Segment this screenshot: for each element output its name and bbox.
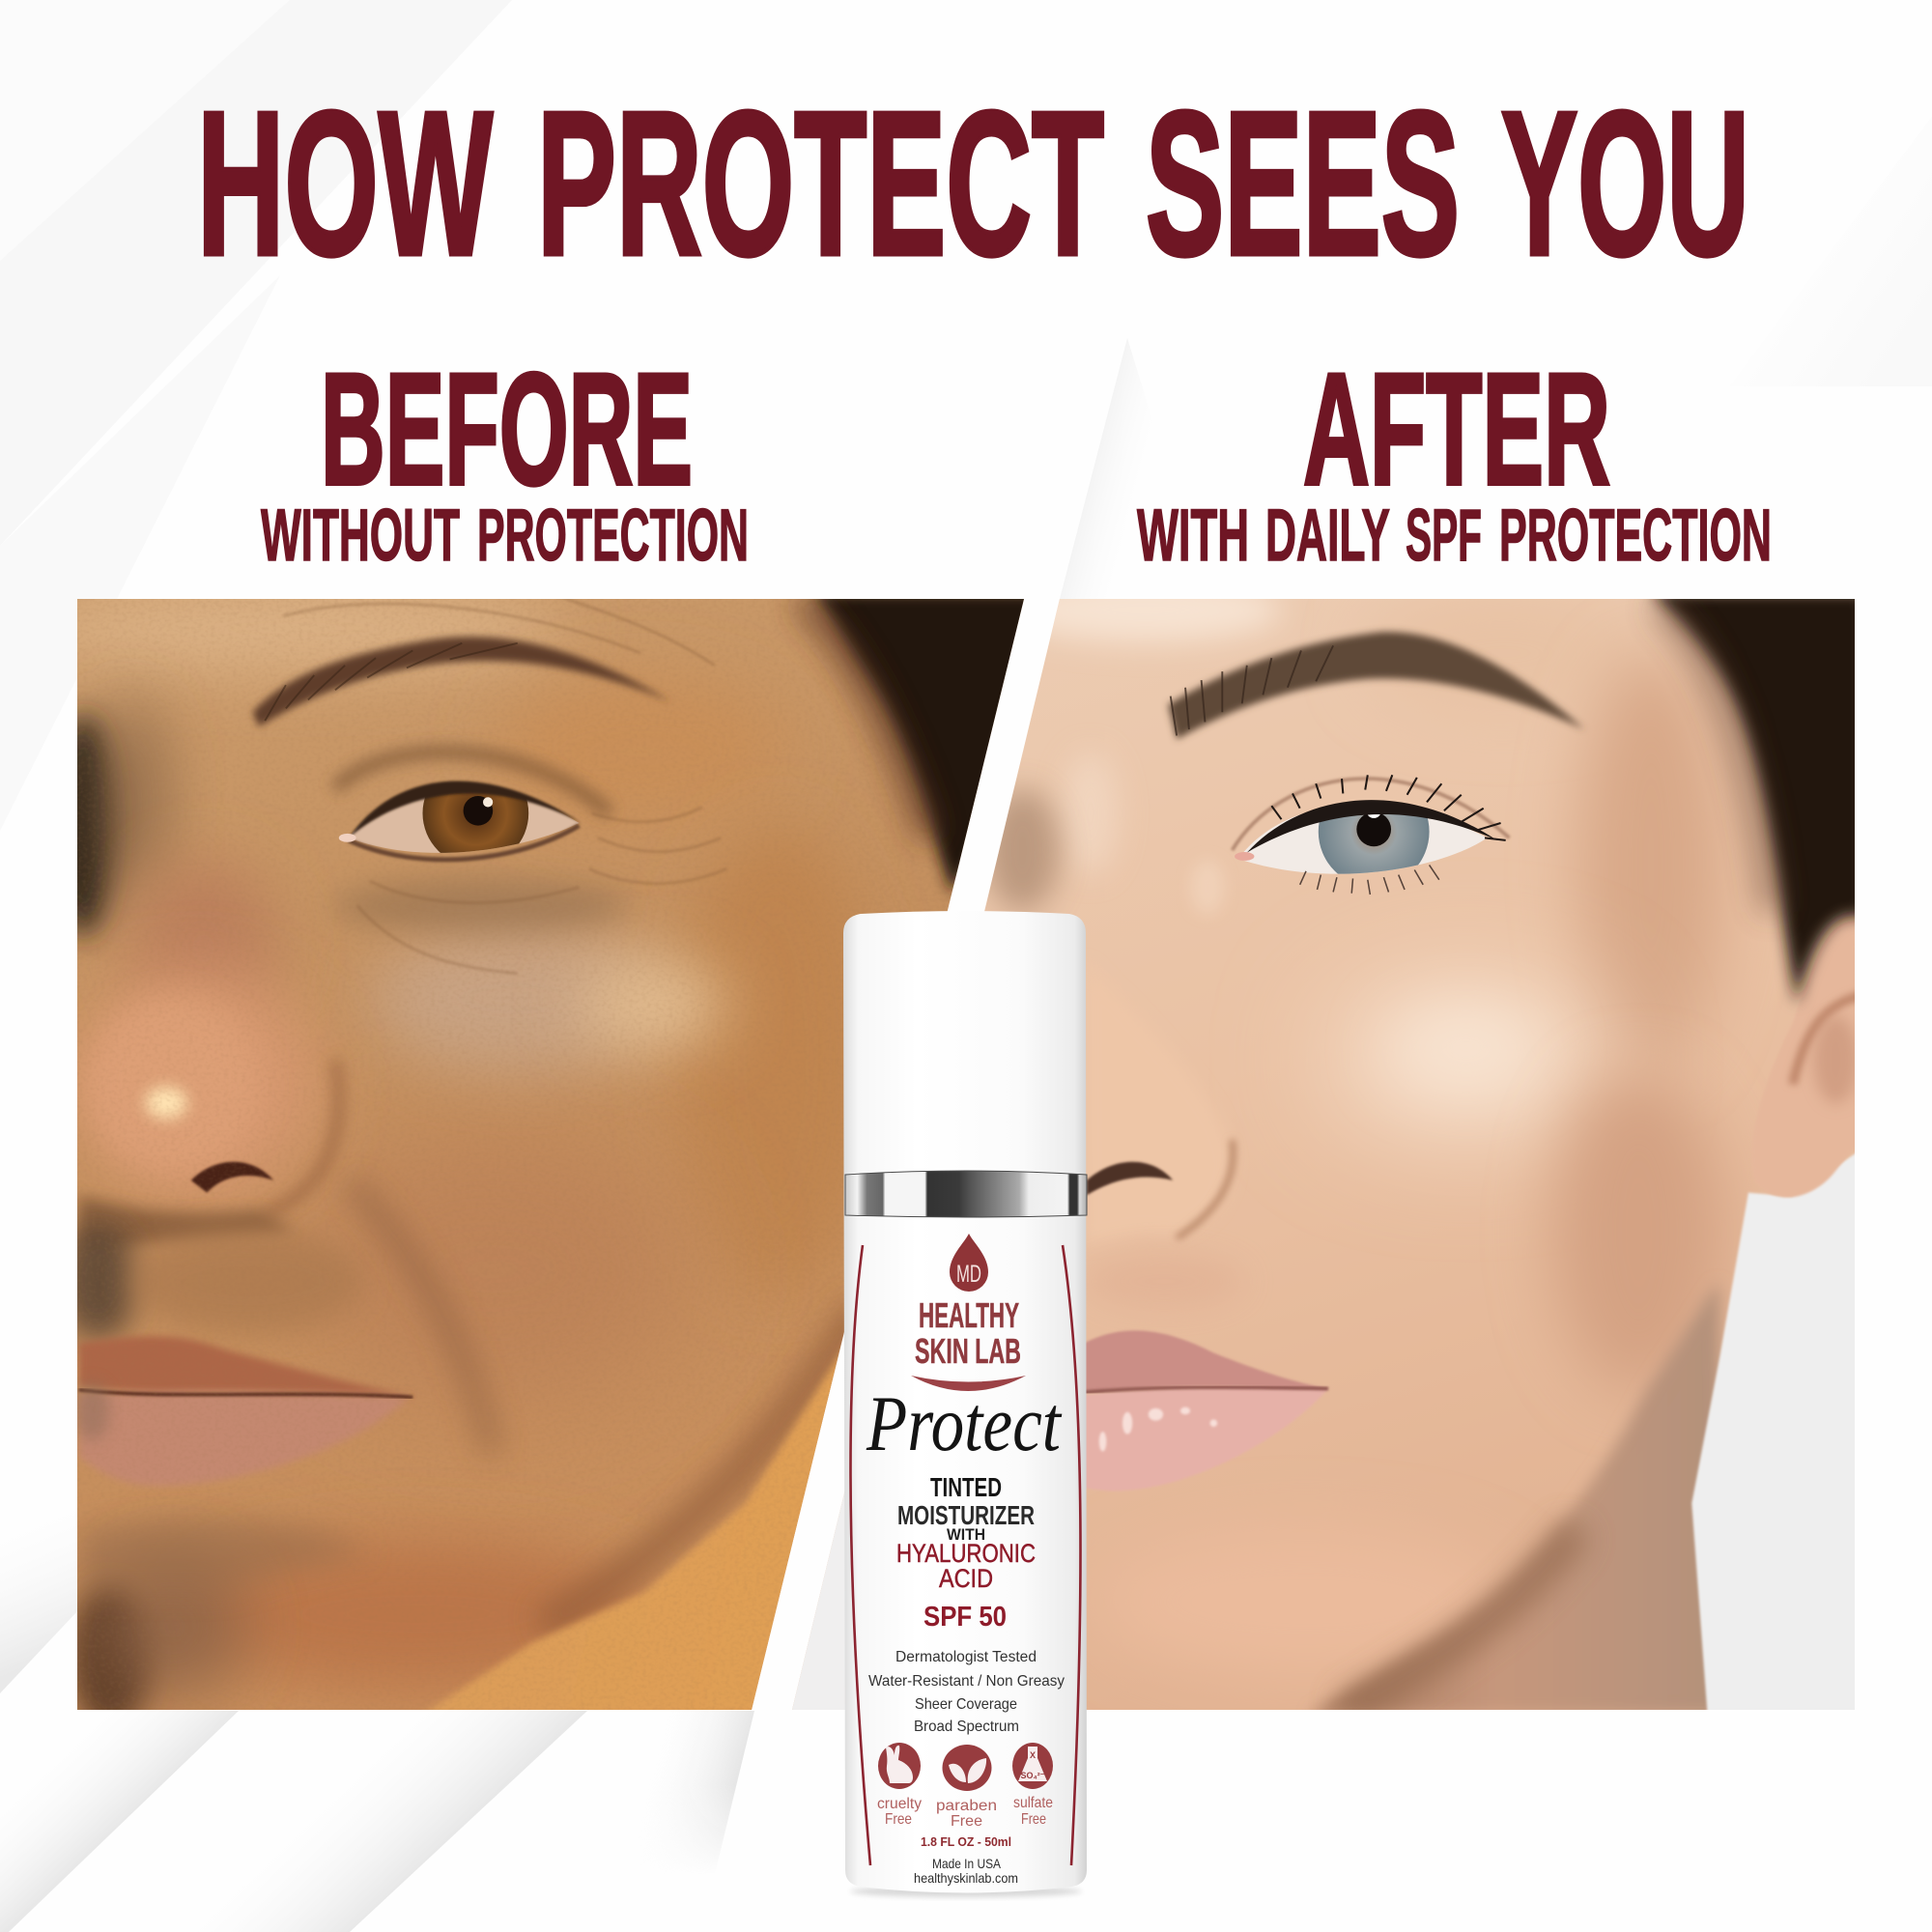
chin shadow [69, 1583, 153, 1731]
lips [79, 1336, 412, 1396]
subheading: without protection: WITHOUT [261, 495, 460, 577]
origin and website: Made In USA [932, 1856, 1002, 1871]
shadow beside nose bridge [52, 715, 116, 936]
product description: SPF 50 [923, 1602, 1007, 1633]
claims list: Dermatologist Tested [895, 1649, 1037, 1665]
neck [429, 1349, 840, 1710]
subheading: with daily spf protection: SPF [1406, 495, 1482, 577]
skin texture [77, 612, 809, 1710]
product description: ACID [939, 1564, 993, 1593]
subheading: with daily spf protection: WITH [1137, 495, 1249, 577]
label side curves [850, 1245, 1081, 1865]
claims list [868, 1649, 1065, 1735]
crow's feet and wrinkles [283, 579, 727, 974]
title: SEES [1146, 69, 1460, 298]
logo drop [950, 1234, 988, 1292]
icon: sulfate free flask: SO₄²⁻ [1020, 1771, 1045, 1780]
title: PROTECT [537, 69, 1104, 298]
subheading: with daily spf protection: DAILY [1265, 495, 1390, 577]
icon labels: paraben [936, 1798, 997, 1814]
product description: MOISTURIZER [897, 1500, 1035, 1530]
studio backdrop [1691, 1146, 1866, 1719]
icon labels: Free [885, 1811, 912, 1828]
eye [335, 753, 610, 813]
title: HOW [197, 69, 493, 298]
forehead light [1010, 578, 1282, 642]
brand name [915, 1295, 1021, 1371]
hair [1651, 591, 1866, 1005]
product description: WITH [947, 1525, 985, 1544]
icon: cruelty free rabbit [878, 1743, 921, 1789]
title: YOU [1501, 69, 1749, 298]
icon labels [877, 1795, 1053, 1830]
eyebrow [1168, 632, 1584, 739]
eye [1233, 779, 1509, 850]
lips [1084, 1330, 1328, 1392]
swoosh [911, 1376, 1026, 1391]
brand name: SKIN LAB [915, 1331, 1021, 1371]
claims list: Broad Spectrum [914, 1719, 1019, 1735]
product description: HYALURONIC [896, 1539, 1036, 1568]
volume: 1.8 FL OZ - 50ml [921, 1834, 1011, 1849]
panel: after face photo [788, 578, 1873, 1719]
title [197, 69, 1749, 298]
claims list: Sheer Coverage [915, 1696, 1017, 1713]
product name: Protect [866, 1379, 1063, 1467]
origin and website [914, 1856, 1018, 1886]
brand name: HEALTHY [919, 1295, 1019, 1335]
neck [1309, 1282, 1725, 1715]
logo drop: MD [956, 1261, 981, 1288]
product bottle [843, 911, 1087, 1897]
claims list: Water-Resistant / Non Greasy [868, 1673, 1065, 1690]
bottle body [843, 911, 1087, 1893]
heading: before: BEFORE [321, 340, 693, 518]
icon: sulfate free flask: X [1030, 1750, 1036, 1760]
nose [1084, 961, 1233, 1244]
product description [896, 1472, 1036, 1633]
icon labels: cruelty [877, 1796, 922, 1812]
product description: TINTED [930, 1472, 1002, 1502]
nose [74, 971, 321, 1198]
bottle shadow [850, 1886, 1082, 1897]
origin and website: healthyskinlab.com [914, 1870, 1018, 1886]
panel: before face photo [25, 579, 1047, 1731]
background: white with soft diagonal folds [0, 339, 1132, 1932]
subheading: with daily spf protection [1137, 495, 1772, 577]
icon: sulfate free flask [1012, 1743, 1053, 1789]
heading: after: AFTER [1303, 340, 1610, 518]
hair [813, 591, 1047, 894]
subheading: without protection: PROTECTION [477, 495, 749, 577]
chrome band [845, 1171, 1087, 1217]
ear [1752, 905, 1861, 1198]
icon labels: Free [1021, 1811, 1046, 1828]
icon: paraben free leaves [943, 1745, 991, 1791]
icon labels: Free [951, 1813, 982, 1830]
icon labels: sulfate [1013, 1795, 1053, 1811]
eyebrow [252, 637, 671, 727]
